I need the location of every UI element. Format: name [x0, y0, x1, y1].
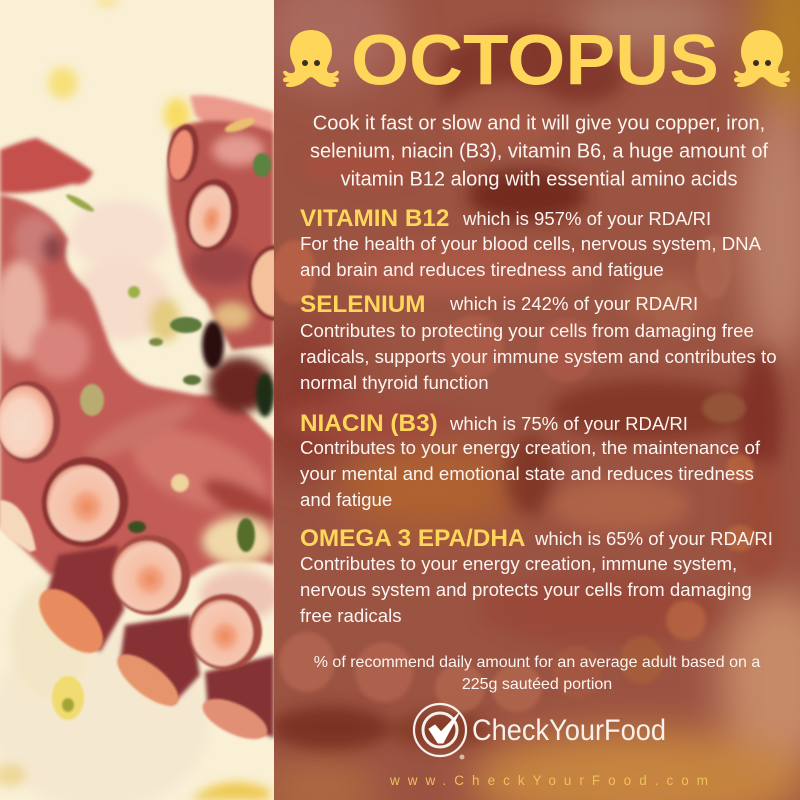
section: selenium: normal thyroid function: [300, 372, 489, 393]
icon: octopus right: [734, 30, 790, 87]
lower suckers: [0, 381, 60, 463]
section: omega 3: Contributes to your energy creation, immune system,: [300, 553, 737, 574]
icon: octopus left: [283, 30, 339, 87]
logo: CheckYourFood: CheckYourFood: [472, 714, 666, 747]
section: omega 3: OMEGA 3 EPA/DHA: [300, 525, 525, 552]
section: vitamin B12: which is 957% of your RDA/RI: [462, 208, 711, 229]
icon: check mark: [414, 704, 466, 756]
section: omega 3: which is 65% of your RDA/RI: [534, 528, 773, 549]
section: niacin: Contributes to your energy creation, the maintenance of: [300, 437, 761, 458]
cut arms: [45, 545, 124, 652]
section: vitamin B12: and brain and reduces tiredness and fatigue: [300, 259, 664, 280]
section: niacin: which is 75% of your RDA/RI: [449, 413, 688, 434]
section: selenium: [300, 291, 777, 393]
upper suckers: [166, 122, 200, 182]
registered mark: [460, 754, 464, 760]
title: [283, 22, 790, 100]
intro paragraph: selenium, niacin (B3), vitamin B6, a huge amount of: [310, 140, 768, 162]
title text: OCTOPUS: [351, 22, 719, 100]
herbs: [64, 192, 96, 214]
section: vitamin B12: [300, 205, 762, 280]
website url: www.CheckYourFood.com: [389, 773, 708, 788]
section: selenium: radicals, supports your immune system and contributes to: [300, 346, 777, 367]
section: omega 3: nervous system and protects your cells from damaging: [300, 579, 752, 600]
food photo: octopus tentacles on cream: [0, 0, 304, 800]
intro paragraph: vitamin B12 along with essential amino acids: [341, 168, 737, 190]
dark translucent panel with blurred photo: [250, 0, 800, 800]
section: niacin: NIACIN (B3): [300, 410, 438, 437]
section: omega 3: [300, 525, 773, 626]
arm masses: [0, 95, 274, 600]
cut ends: [38, 588, 104, 654]
section: selenium: which is 242% of your RDA/RI: [449, 293, 698, 314]
section: vitamin B12: VITAMIN B12: [300, 205, 449, 232]
logo: CheckYourFood: [414, 704, 666, 760]
section: niacin: and fatigue: [300, 489, 392, 510]
section: vitamin B12: For the health of your blood cells, nervous system, DNA: [300, 233, 762, 254]
footnote: [314, 654, 760, 693]
section: niacin: [300, 410, 761, 510]
section: omega 3: free radicals: [300, 605, 402, 626]
footnote: % of recommend daily amount for an average adult based on a: [314, 654, 760, 671]
section: selenium: SELENIUM: [300, 291, 426, 318]
footnote: 225g sautéed portion: [462, 676, 612, 693]
section: selenium: Contributes to protecting your cells from damaging free: [300, 320, 754, 341]
intro paragraph: [310, 112, 768, 190]
intro paragraph: Cook it fast or slow and it will give you copper, iron,: [313, 112, 765, 134]
section: niacin: your mental and emotional state and reduces tiredness: [300, 463, 754, 484]
